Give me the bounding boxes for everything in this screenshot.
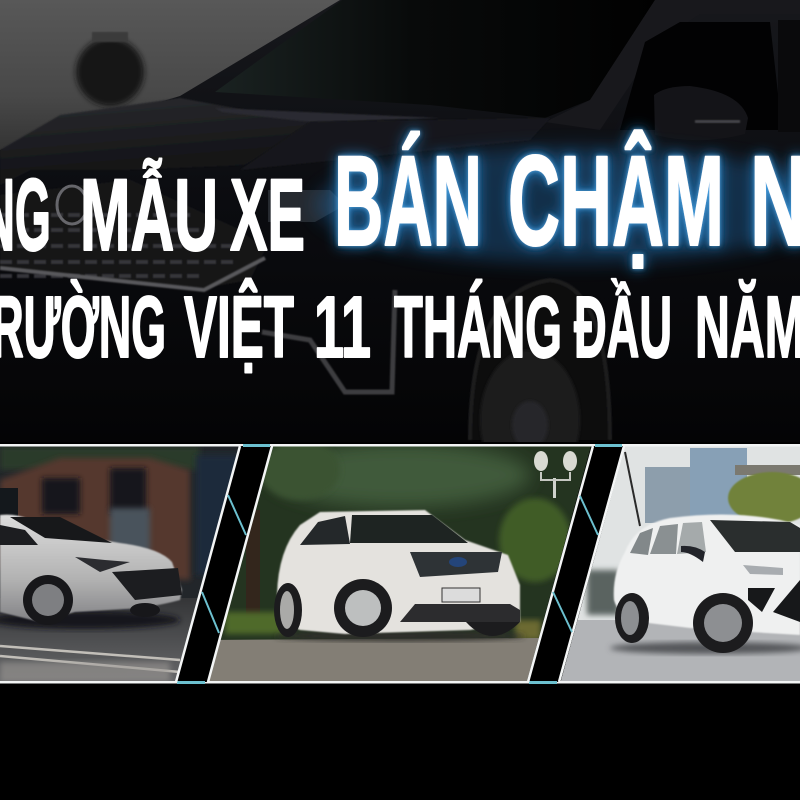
wheel arch xyxy=(470,280,610,440)
A-pillar and door frame xyxy=(548,116,608,130)
divider: right slash xyxy=(528,444,624,684)
hero photo: dark car xyxy=(0,0,800,490)
grille xyxy=(0,180,265,288)
heading line 1: glowing part: BÁN xyxy=(334,130,482,273)
heading line 2: ĐẦU xyxy=(574,279,672,376)
heading line 2: VIỆT xyxy=(184,279,294,376)
windshield xyxy=(215,0,655,118)
street lamp xyxy=(534,451,577,498)
panel: white Ford Explorer xyxy=(200,440,592,682)
title xyxy=(0,129,800,376)
panel: silver Toyota Corolla hatchback xyxy=(0,446,240,682)
heading line 2: 11 xyxy=(314,279,371,376)
blue glow behind heading xyxy=(315,147,800,263)
heading line 1: white part: XE xyxy=(230,158,305,272)
heading line 2 xyxy=(0,279,800,376)
heading line 1: glowing part xyxy=(334,129,800,273)
side mirror xyxy=(654,86,748,130)
bush xyxy=(728,472,800,524)
hood xyxy=(0,98,310,185)
heading line 2: THÁNG xyxy=(394,279,562,376)
side window xyxy=(620,22,782,130)
frame: white rules xyxy=(0,444,800,684)
front bumper detail xyxy=(262,290,395,392)
wheel xyxy=(480,350,580,442)
car body xyxy=(0,515,182,622)
panel: white Toyota Avanza xyxy=(560,446,800,682)
car body xyxy=(0,0,800,242)
car body xyxy=(277,510,520,634)
divider: left slash xyxy=(176,444,272,684)
car body xyxy=(614,514,800,635)
heading line 1: white part: MẪU xyxy=(80,158,218,272)
buildings xyxy=(645,448,800,523)
